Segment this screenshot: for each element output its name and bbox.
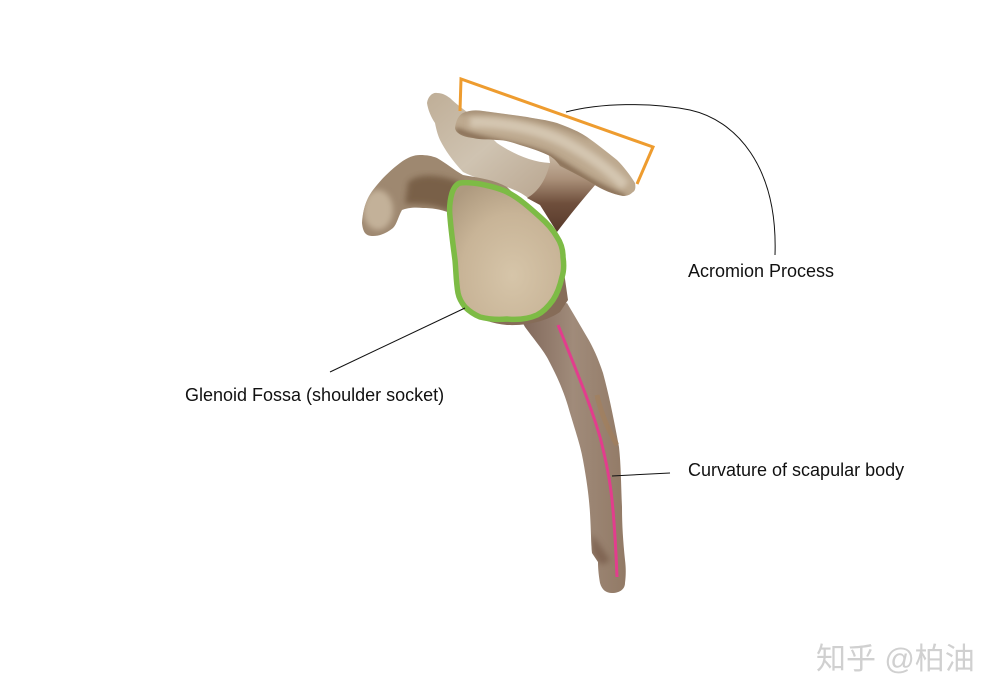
glenoid neck (458, 265, 568, 325)
scapular body (520, 303, 626, 593)
pale upper blade (427, 93, 550, 198)
green outline: glenoid fossa (450, 183, 564, 319)
watermark: 知乎 @柏油 (816, 643, 975, 676)
label: glenoid fossa: Glenoid Fossa (shoulder socket) (185, 385, 444, 405)
label: curvature of scapular body: Curvature of scapular body (688, 460, 904, 480)
scapula bone illustration (362, 93, 635, 593)
acromion (455, 110, 635, 198)
pink curve: scapular body curvature (558, 325, 617, 577)
coracoid process (362, 155, 520, 236)
leader line: glenoid fossa (330, 308, 465, 372)
label: acromion process: Acromion Process (688, 261, 834, 281)
leader line: curvature (612, 473, 670, 476)
orange bracket: acromion (460, 79, 653, 184)
scapular spine stem (527, 150, 596, 232)
leader line: acromion process (566, 105, 775, 255)
glenoid fossa surface (450, 183, 564, 319)
